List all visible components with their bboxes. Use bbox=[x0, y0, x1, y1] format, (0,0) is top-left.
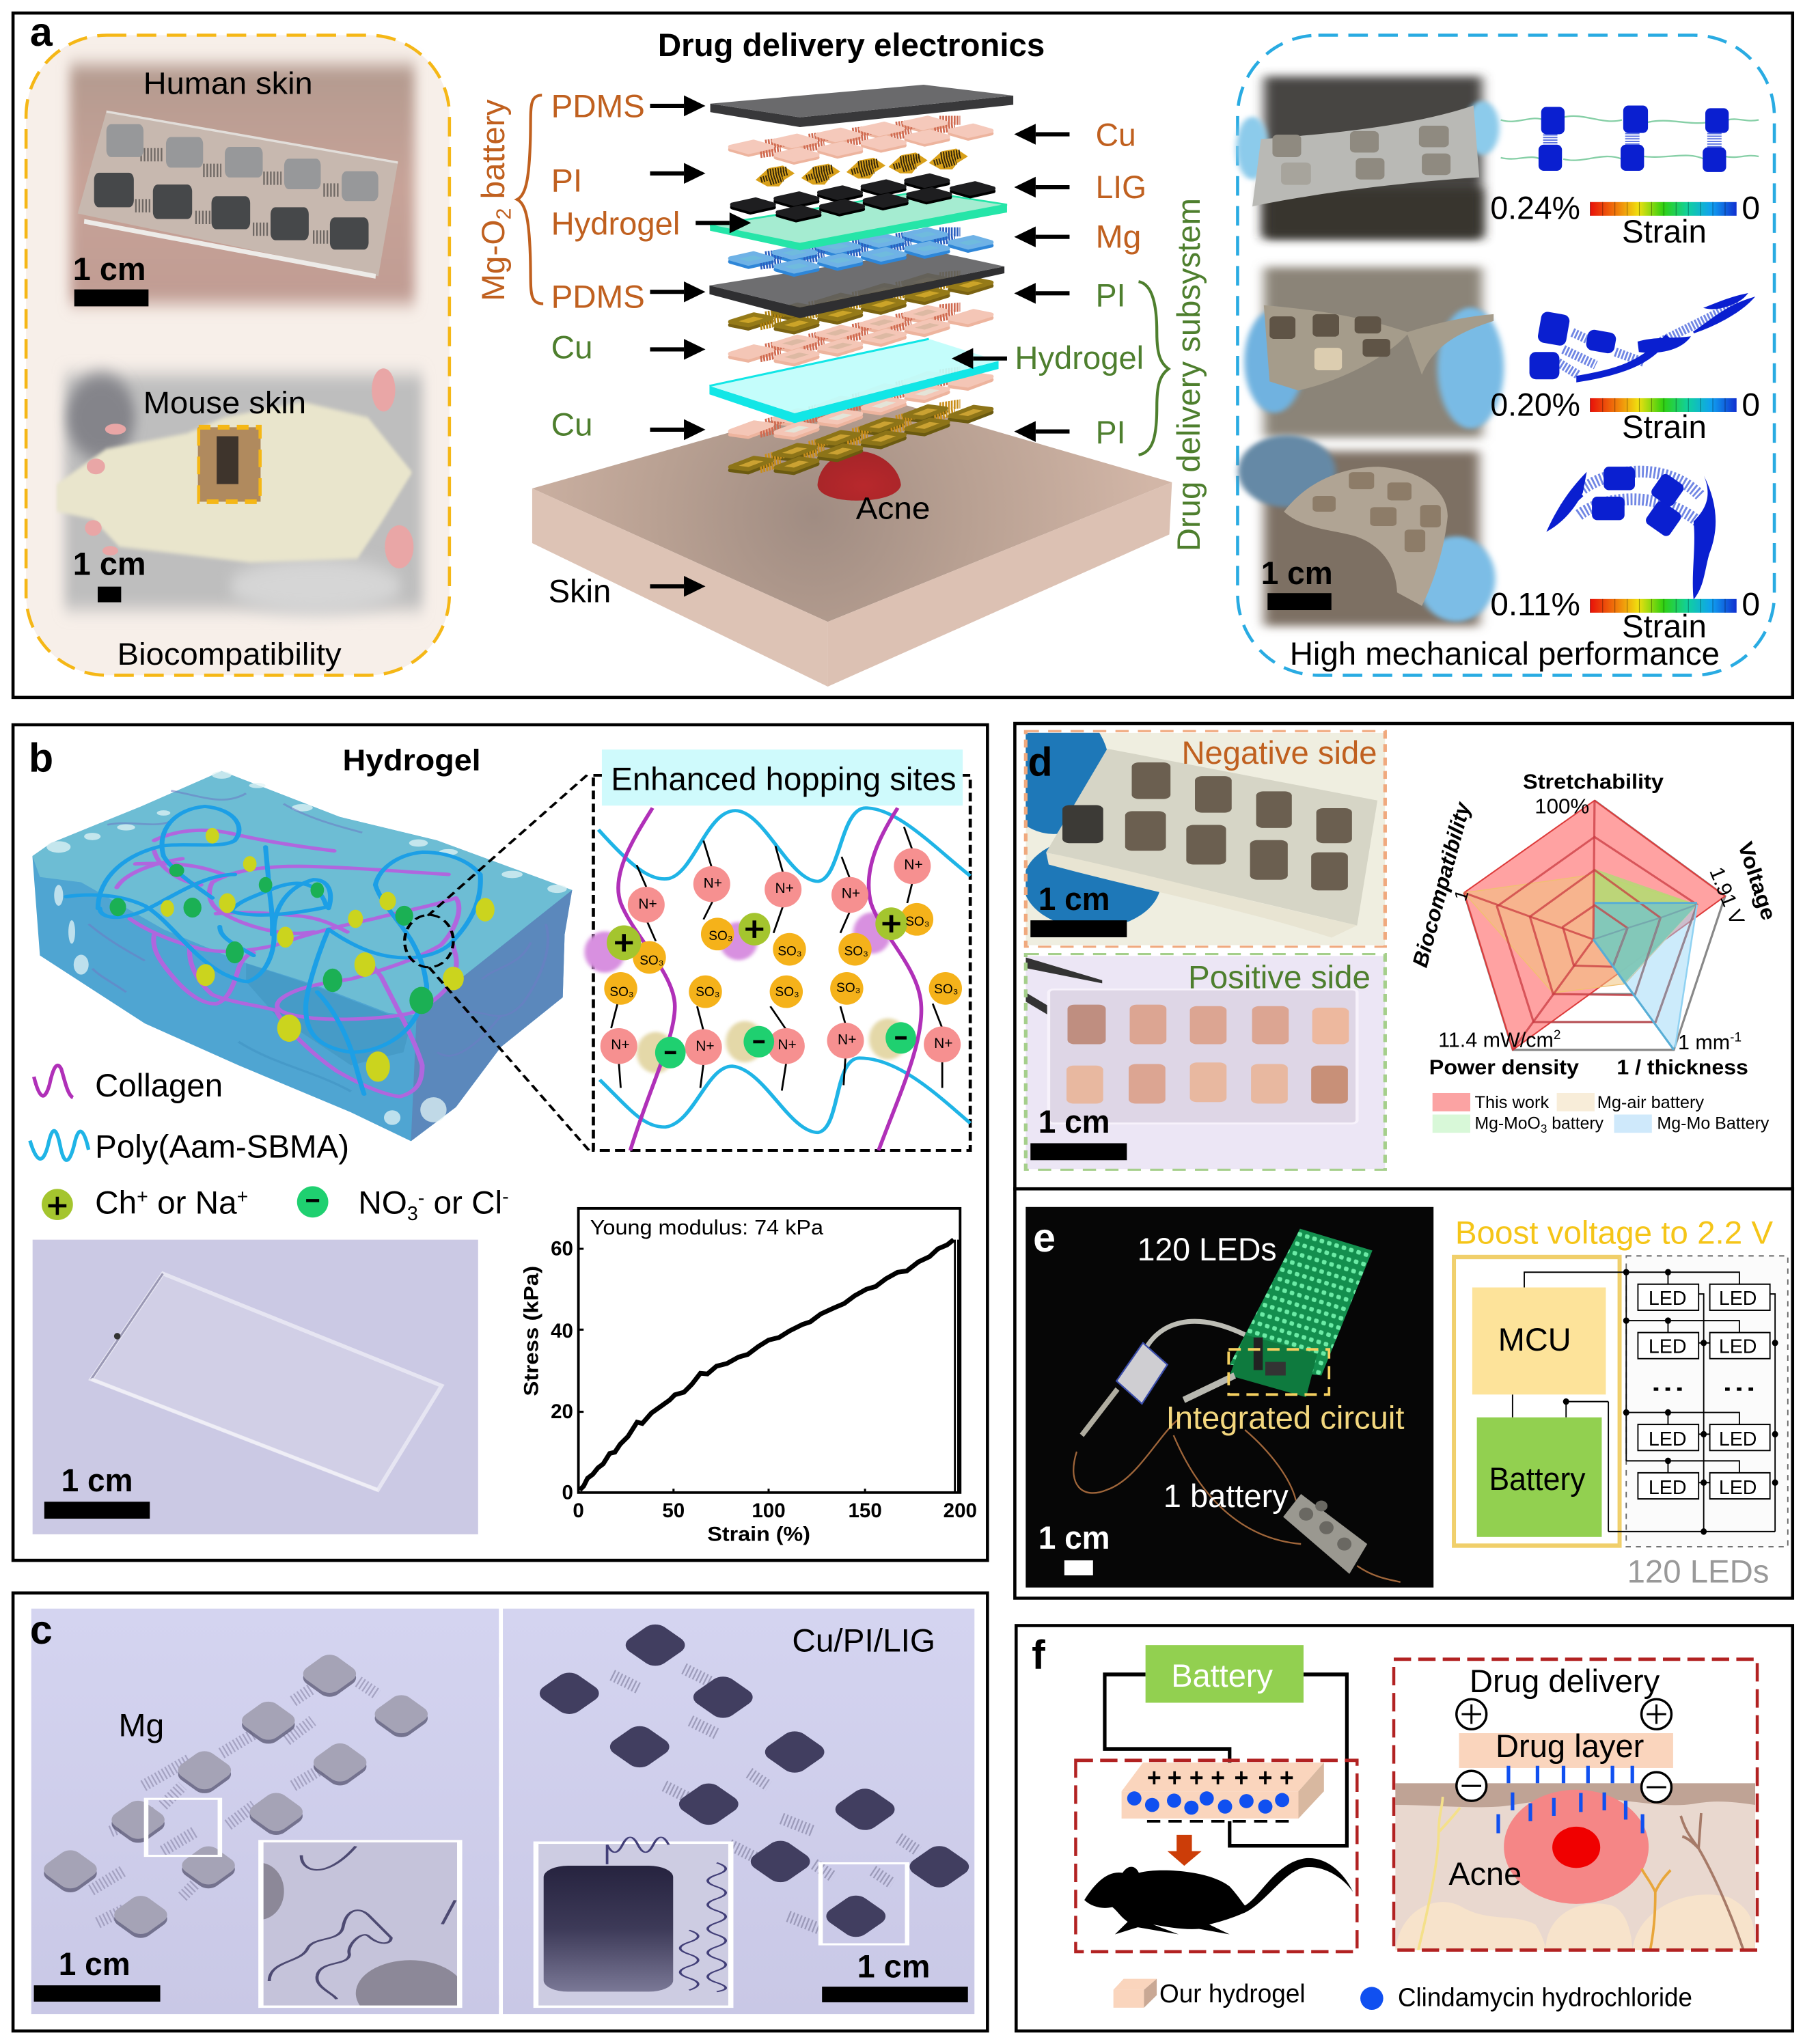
legend: anion bbox=[297, 1185, 509, 1225]
simulation 1 bbox=[1501, 106, 1759, 172]
photo: LED board bbox=[1026, 1207, 1433, 1588]
polymer chains bbox=[598, 808, 970, 1133]
electrode plus right bbox=[1642, 1699, 1671, 1729]
scale bar right: 1 cm bbox=[857, 1949, 930, 1985]
glows bbox=[584, 912, 907, 1073]
photo: twisted device bbox=[1244, 267, 1504, 438]
legend: anion: - bbox=[418, 1187, 424, 1209]
small ion labels: N+ bbox=[704, 875, 722, 891]
dashed IC marker bbox=[1228, 1349, 1329, 1394]
mouse silhouette bbox=[1084, 1858, 1353, 1934]
magnified inset: electrode bbox=[536, 1837, 731, 2006]
right green labels: PI bbox=[1096, 277, 1125, 314]
small ion labels: SO₃ bbox=[905, 915, 930, 929]
PDMS plate lower bbox=[709, 250, 1004, 318]
strain bar 3 bbox=[1490, 587, 1760, 645]
small ion labels: SO₃ bbox=[775, 985, 799, 999]
LED boxes bbox=[1638, 1284, 1770, 1499]
collagen chains bbox=[618, 808, 922, 1150]
electrode plus left bbox=[1457, 1699, 1487, 1729]
small ion labels: N+ bbox=[775, 881, 794, 896]
radar axis labels: Stretchability bbox=[1523, 770, 1664, 793]
legend: cation: Ch bbox=[95, 1185, 137, 1221]
photo: positive side bbox=[1026, 954, 1385, 1170]
small ion labels: N+ bbox=[777, 1037, 797, 1053]
label: skin: Skin bbox=[549, 574, 611, 610]
skin block bbox=[532, 393, 1172, 687]
radar chart bbox=[1464, 801, 1725, 1050]
N+ groups bbox=[601, 848, 961, 1065]
radar value power: 2 bbox=[1554, 1028, 1561, 1042]
legend: cation: or Na bbox=[148, 1185, 237, 1221]
panel letter c: c bbox=[30, 1607, 53, 1653]
right orange labels bbox=[1096, 118, 1146, 255]
collagen strands bbox=[117, 830, 459, 1096]
radar value voltage: 1.91 V bbox=[1705, 864, 1749, 928]
right green labels: Hydrogel bbox=[1015, 340, 1144, 376]
x tick labels: 100 bbox=[752, 1500, 786, 1522]
panel e: LED demonstration bbox=[1015, 1189, 1793, 1598]
battery label rotated: Mg-O bbox=[476, 220, 512, 301]
y tick labels: 40 bbox=[551, 1320, 573, 1342]
wires bbox=[1073, 1419, 1401, 1582]
gold serpentines bbox=[756, 149, 968, 187]
radar axis: power density: Power density bbox=[1429, 1055, 1579, 1079]
epidermis bbox=[1395, 1783, 1755, 1807]
migrating drug molecules bbox=[1498, 1766, 1642, 1833]
label: mouse skin: Mouse skin bbox=[143, 385, 306, 420]
dashed divider bbox=[500, 1609, 502, 2014]
series: this work bbox=[1464, 801, 1725, 1050]
y tick labels bbox=[551, 1238, 573, 1504]
battery labels: PDMS bbox=[551, 89, 645, 125]
radar legend: Mg-MoO bbox=[1474, 1114, 1541, 1133]
simulation 3 bbox=[1546, 467, 1716, 600]
dermis bbox=[1395, 1783, 1755, 1950]
small ion labels: SO₃ bbox=[609, 985, 634, 999]
photo: stretched device bbox=[1236, 77, 1500, 238]
legend: clindamycin: Clindamycin hydrochloride bbox=[1398, 1983, 1692, 2013]
y tick labels: 20 bbox=[551, 1400, 573, 1423]
label: battery: Battery bbox=[1489, 1461, 1586, 1497]
hydrogel network block bbox=[32, 771, 572, 1141]
right green labels: PI bbox=[1096, 415, 1125, 451]
overlap region bbox=[1593, 903, 1697, 984]
left green labels: Cu bbox=[551, 406, 593, 443]
legend: anion: 3 bbox=[407, 1203, 418, 1225]
LED labels bbox=[1649, 1288, 1757, 1499]
strain bar 1 bbox=[1490, 191, 1760, 250]
brace: drug delivery bbox=[1139, 281, 1168, 455]
label: boost voltage: Boost voltage to 2.2 V bbox=[1455, 1215, 1773, 1251]
x tick labels: 200 bbox=[944, 1500, 977, 1522]
panel f: drug delivery principle bbox=[1016, 1625, 1793, 2031]
cations bbox=[607, 907, 907, 960]
small ion labels: N+ bbox=[611, 1037, 630, 1053]
small ion labels: SO₃ bbox=[777, 945, 802, 959]
y tick labels: 0 bbox=[562, 1481, 573, 1504]
battery labels: Hydrogel bbox=[551, 206, 680, 242]
radar legend: Mg-air battery bbox=[1597, 1094, 1705, 1112]
small ion labels bbox=[609, 857, 958, 1054]
strain bar 2: 0.20% bbox=[1490, 387, 1580, 424]
radar axis: biocompatibility: Biocompatibility bbox=[1408, 799, 1475, 970]
heading: hydrogel: Hydrogel bbox=[342, 744, 481, 777]
drug dots bbox=[1127, 1791, 1289, 1814]
polymer strands bbox=[66, 806, 480, 1094]
skin schematic bbox=[1394, 1659, 1757, 1950]
legend: cation: + bbox=[237, 1186, 248, 1208]
radar legend: battery bbox=[1547, 1114, 1604, 1133]
right orange labels: LIG bbox=[1096, 169, 1146, 206]
photo: negative side bbox=[1023, 730, 1387, 948]
x axis title: Strain (%) bbox=[707, 1523, 810, 1545]
label: Cu/PI/LIG: Cu/PI/LIG bbox=[792, 1623, 935, 1659]
SO3 groups bbox=[604, 903, 962, 1008]
legend: collagen bbox=[34, 1066, 223, 1104]
MCU block bbox=[1472, 1288, 1606, 1394]
dashed frame right bbox=[1394, 1659, 1757, 1950]
label: 120 LEDs white: 120 LEDs bbox=[1138, 1232, 1277, 1268]
scale bar left: 1 cm bbox=[59, 1946, 130, 1983]
small ion labels: SO₃ bbox=[708, 929, 733, 943]
acne lesion bbox=[1504, 1790, 1649, 1904]
battery labels: PDMS bbox=[551, 279, 645, 315]
wire nodes bbox=[1563, 1269, 1778, 1535]
radar legend bbox=[1433, 1093, 1770, 1135]
panel a mechanical performance box bbox=[1236, 36, 1774, 675]
left arrows bbox=[650, 96, 751, 597]
scale bar left bbox=[34, 1946, 161, 2002]
battery block bbox=[1146, 1645, 1304, 1702]
LED labels: LED bbox=[1649, 1477, 1687, 1499]
right arrows bbox=[952, 124, 1069, 442]
series: Mg-air bbox=[1464, 874, 1697, 993]
magnesium pads bbox=[730, 230, 991, 275]
scale bar: 1 cm bbox=[1261, 555, 1333, 592]
strain bar 1: Strain bbox=[1622, 214, 1707, 250]
battery block bbox=[1477, 1418, 1601, 1537]
label: one battery: 1 battery bbox=[1164, 1478, 1289, 1515]
right green labels bbox=[1015, 277, 1144, 451]
electrode minus left bbox=[1457, 1771, 1487, 1801]
LED labels: LED bbox=[1719, 1288, 1757, 1310]
darker interior wedge bbox=[246, 963, 411, 1065]
left green labels: Cu bbox=[551, 330, 593, 366]
legend: our hydrogel: Our hydrogel bbox=[1159, 1979, 1306, 2008]
simulation 2 bbox=[1530, 294, 1752, 379]
gold pads lower bbox=[730, 396, 991, 483]
circuit wires bbox=[1105, 1674, 1347, 1846]
photo: device on human skin bbox=[70, 64, 415, 304]
down arrow bbox=[1168, 1835, 1202, 1866]
zoom markers bbox=[146, 1799, 907, 1944]
scale bar human bbox=[73, 251, 148, 306]
charge marks bbox=[615, 915, 907, 1053]
ions yellow bbox=[161, 828, 495, 1082]
label box: enhanced hopping sites bbox=[602, 749, 963, 805]
label: battery white: Battery bbox=[1171, 1658, 1273, 1694]
blue outline bbox=[1593, 903, 1697, 1050]
label: Mg: Mg bbox=[119, 1708, 164, 1744]
radar legend: This work bbox=[1474, 1094, 1550, 1112]
small ion labels: N+ bbox=[934, 1036, 953, 1051]
small ion labels: SO₃ bbox=[696, 985, 720, 999]
red guide pentagons bbox=[1497, 837, 1697, 1022]
PDMS plate top bbox=[711, 85, 1013, 127]
scale bar positive bbox=[1030, 1104, 1127, 1160]
radar value power: 11.4 mW/cm bbox=[1438, 1028, 1554, 1051]
plus signs bbox=[1148, 1771, 1293, 1784]
x tick labels: 150 bbox=[848, 1500, 882, 1522]
label: biocompatibility: Biocompatibility bbox=[118, 637, 342, 672]
brace: battery bbox=[517, 95, 543, 304]
scale bar human: 1 cm bbox=[73, 251, 146, 288]
series: Mg-MoO3 bbox=[1595, 869, 1697, 904]
panel letter b: b bbox=[29, 735, 53, 781]
right orange labels: Cu bbox=[1096, 118, 1136, 154]
LED board body bbox=[1230, 1229, 1373, 1375]
strain bar 3: 0 bbox=[1742, 587, 1760, 623]
yellow double frame bbox=[1453, 1256, 1621, 1547]
label: acne: Acne bbox=[1448, 1856, 1522, 1892]
hydrogel plate cyan bbox=[709, 339, 999, 423]
legend: cation: + bbox=[137, 1186, 148, 1208]
legend: anion: or Cl bbox=[424, 1185, 502, 1221]
pouch bbox=[1116, 1343, 1168, 1404]
radar grid bbox=[1464, 801, 1725, 1050]
fat bbox=[1395, 1894, 1755, 1950]
radar legend: 3 bbox=[1541, 1122, 1547, 1135]
ions green bbox=[109, 864, 433, 1014]
strain bar 1: 0.24% bbox=[1490, 191, 1580, 227]
LED dashed region bbox=[1626, 1256, 1788, 1547]
minus signs bbox=[1147, 1819, 1294, 1823]
label: negative side: Negative side bbox=[1181, 735, 1377, 771]
radar value 100 percent: 100% bbox=[1534, 795, 1589, 818]
hydrogel plate green bbox=[710, 191, 1007, 250]
scale bar positive: 1 cm bbox=[1038, 1104, 1110, 1140]
battery labels bbox=[551, 89, 680, 315]
panel letter e: e bbox=[1033, 1215, 1056, 1260]
small ion labels: SO₃ bbox=[836, 981, 860, 995]
copper layer middle bbox=[730, 302, 991, 370]
strain bar 2 bbox=[1490, 387, 1760, 445]
chart annotation: Young modulus: 74 kPa bbox=[590, 1216, 823, 1239]
electrode minus right bbox=[1642, 1772, 1671, 1802]
exploded device stack bbox=[532, 85, 1172, 687]
battery label rotated: 2 bbox=[492, 208, 515, 220]
left green labels bbox=[551, 330, 593, 443]
photo: magnesium electrodes bbox=[31, 1609, 499, 2014]
side chains bbox=[611, 827, 942, 1090]
gold pads middle bbox=[730, 270, 991, 338]
panel a biocompatibility box bbox=[26, 36, 450, 675]
label: 120 LEDs grey: 120 LEDs bbox=[1627, 1553, 1769, 1590]
label: high mechanical performance: High mechanical performance bbox=[1290, 636, 1720, 672]
photo: hydrogel film bbox=[33, 1240, 478, 1534]
small ion labels: N+ bbox=[696, 1038, 715, 1054]
label: positive side: Positive side bbox=[1188, 959, 1371, 995]
scale bar white: 1 cm bbox=[1038, 1520, 1110, 1556]
copper layer lower bbox=[730, 364, 991, 447]
zoom circle and guide lines bbox=[404, 775, 589, 1150]
battery label rotated: battery bbox=[476, 99, 512, 208]
hydrogel block bbox=[1122, 1763, 1324, 1819]
strain bar 3: 0.11% bbox=[1490, 587, 1580, 623]
panel letter d: d bbox=[1028, 738, 1053, 784]
label: integrated circuit: Integrated circuit bbox=[1166, 1400, 1405, 1436]
y tick labels: 60 bbox=[551, 1238, 573, 1260]
block body bbox=[32, 771, 572, 1141]
panel letter a: a bbox=[30, 9, 53, 55]
ellipsis dots bbox=[1654, 1387, 1754, 1391]
scale bar bbox=[1261, 555, 1333, 610]
small ion labels: N+ bbox=[838, 1032, 856, 1047]
anions bbox=[655, 1022, 916, 1068]
legend: anion: - bbox=[502, 1186, 509, 1208]
small ion labels: SO₃ bbox=[844, 945, 868, 959]
stress strain chart bbox=[521, 1209, 977, 1545]
legend: anion: NO bbox=[358, 1185, 407, 1221]
LIG pads bbox=[732, 176, 993, 220]
panel d: battery sides and radar bbox=[997, 706, 1793, 1189]
scale bar mouse: 1 cm bbox=[73, 546, 146, 583]
scale bar right bbox=[822, 1949, 968, 2002]
x tick labels: 50 bbox=[662, 1500, 685, 1522]
radar value thickness: -1 bbox=[1730, 1031, 1742, 1045]
label: human skin: Human skin bbox=[143, 66, 313, 100]
panel c: electrodes bbox=[13, 1593, 987, 2031]
strain bar 3: Strain bbox=[1622, 609, 1707, 645]
small ion labels: N+ bbox=[842, 886, 860, 902]
panel letter f: f bbox=[1032, 1631, 1045, 1677]
scale bar hydrogel bbox=[44, 1463, 150, 1519]
magnified inset: magnesium bbox=[258, 1840, 462, 2008]
LED labels: LED bbox=[1649, 1336, 1687, 1358]
small ion labels: SO₃ bbox=[934, 982, 958, 997]
x tick labels bbox=[573, 1500, 977, 1522]
animal schematic bbox=[1075, 1645, 1357, 1952]
radar axis: voltage: Voltage bbox=[1733, 839, 1780, 923]
series: Mg-Mo bbox=[1593, 903, 1697, 1050]
right orange labels: Mg bbox=[1096, 219, 1141, 255]
drug delivery subsystem label: Drug delivery subsystem bbox=[1171, 198, 1207, 551]
title: drug delivery electronics: Drug delivery electronics bbox=[658, 27, 1045, 64]
scale bar mouse bbox=[73, 546, 146, 603]
radar value 1: 1 bbox=[1450, 887, 1472, 903]
label: drug delivery: Drug delivery bbox=[1470, 1663, 1660, 1700]
panel b: hydrogel bbox=[13, 725, 987, 1560]
radar value thickness: 1 mm bbox=[1678, 1031, 1730, 1054]
radar legend: Mg-Mo Battery bbox=[1657, 1114, 1770, 1133]
acne dome bbox=[818, 451, 901, 501]
label box: enhanced hopping sites: Enhanced hopping sites bbox=[611, 761, 956, 797]
small ion labels: N+ bbox=[904, 857, 923, 873]
copper layer upper bbox=[730, 118, 991, 163]
battery labels: PI bbox=[551, 163, 582, 199]
strain bar 1: 0 bbox=[1742, 191, 1760, 227]
circuit diagram bbox=[1453, 1256, 1788, 1547]
strain bar 2: 0 bbox=[1742, 387, 1760, 424]
scale bar negative: 1 cm bbox=[1038, 881, 1110, 917]
strain bar 2: Strain bbox=[1622, 409, 1707, 445]
legend: cation bbox=[42, 1185, 248, 1221]
panel a: device overview bbox=[13, 9, 1793, 698]
acne core bbox=[1552, 1827, 1600, 1868]
scale bar white bbox=[1038, 1520, 1110, 1575]
photo: Cu/PI/LIG electrodes bbox=[503, 1609, 974, 2014]
small ion labels: SO₃ bbox=[639, 954, 664, 968]
LED labels: LED bbox=[1719, 1428, 1757, 1450]
inset: hopping sites bbox=[584, 775, 970, 1150]
x tick labels: 0 bbox=[573, 1500, 584, 1522]
nerves bbox=[1418, 1797, 1460, 1950]
photo: device on mouse skin bbox=[57, 368, 423, 613]
legend: polymer: Poly(Aam-SBMA) bbox=[95, 1129, 349, 1165]
wires bbox=[1513, 1272, 1775, 1532]
radar axis: thickness: 1 / thickness bbox=[1616, 1055, 1748, 1079]
y axis title: Stress (kPa) bbox=[521, 1266, 543, 1396]
LED labels: LED bbox=[1649, 1288, 1687, 1310]
scale bar hydrogel: 1 cm bbox=[61, 1463, 133, 1499]
legend: collagen: Collagen bbox=[95, 1068, 223, 1104]
LED labels: LED bbox=[1719, 1336, 1757, 1358]
label: drug layer: Drug layer bbox=[1496, 1728, 1644, 1765]
drug layer bbox=[1459, 1733, 1673, 1768]
LED labels: LED bbox=[1719, 1477, 1757, 1499]
dashed frame bbox=[1075, 1760, 1357, 1952]
label: acne: Acne bbox=[856, 491, 930, 525]
battery device bbox=[1283, 1494, 1367, 1574]
scale bar negative bbox=[1030, 881, 1127, 937]
LED labels: LED bbox=[1649, 1428, 1687, 1450]
photo: bent device bbox=[1238, 435, 1496, 626]
label: MCU: MCU bbox=[1498, 1322, 1571, 1358]
small ion labels: N+ bbox=[638, 896, 657, 912]
